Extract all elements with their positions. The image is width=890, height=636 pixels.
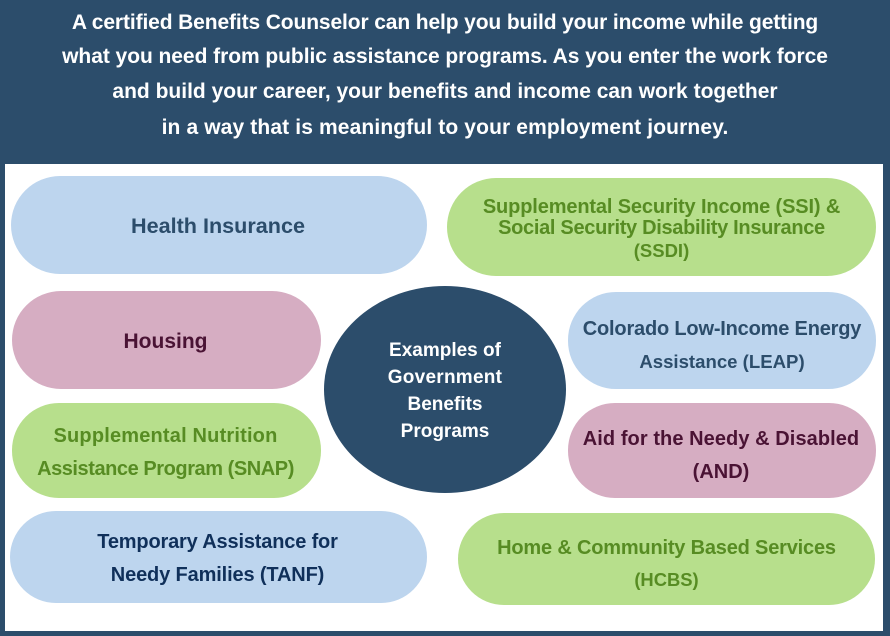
pill: Housing [12,291,321,389]
pill: SSI and SSDI [447,178,876,276]
pill: Housing: Housing [124,330,208,353]
pill: SSI and SSDI: (SSDI) [634,240,689,261]
center circle: Government [388,366,502,388]
pill: SNAP: Assistance Program (SNAP) [37,458,294,480]
pill: HCBS [458,513,875,605]
pill: Health Insurance: Health Insurance [131,213,305,238]
pill: HCBS: Home & Community Based Services [497,536,836,558]
pill: TANF [10,511,427,603]
pill: Health Insurance [11,176,427,274]
white panel [5,164,883,631]
header text: A certified Benefits Counselor can help you build your income while getting [72,11,818,34]
center circle: Examples of [389,340,501,360]
pill: HCBS: (HCBS) [634,569,699,590]
header text: what you need from public assistance programs. As you enter the work force [62,45,828,68]
header text [62,11,828,139]
pill: LEAP: Assistance (LEAP) [639,350,805,372]
pill: TANF: Temporary Assistance for [97,531,338,553]
header text: and build your career, your benefits and income can work together [112,80,778,103]
pill: AND: Aid for the Needy & Disabled [583,428,859,450]
pill: SSI and SSDI: Supplemental Security Income (SSI) & [483,196,840,218]
header text: in a way that is meaningful to your employment journey. [162,116,728,139]
pill: LEAP: Colorado Low-Income Energy [583,318,861,340]
pill: AND [568,403,876,498]
center circle [324,286,566,493]
pill: SNAP: Supplemental Nutrition [54,424,277,446]
pill: AND: (AND) [693,460,749,482]
pill: TANF: Needy Families (TANF) [111,564,324,586]
pill: SNAP [12,403,321,498]
center circle: Benefits [408,394,482,414]
pill: LEAP [568,292,876,389]
center circle: Programs [401,420,489,442]
pill: SSI and SSDI: Social Security Disability Insurance [498,217,825,239]
